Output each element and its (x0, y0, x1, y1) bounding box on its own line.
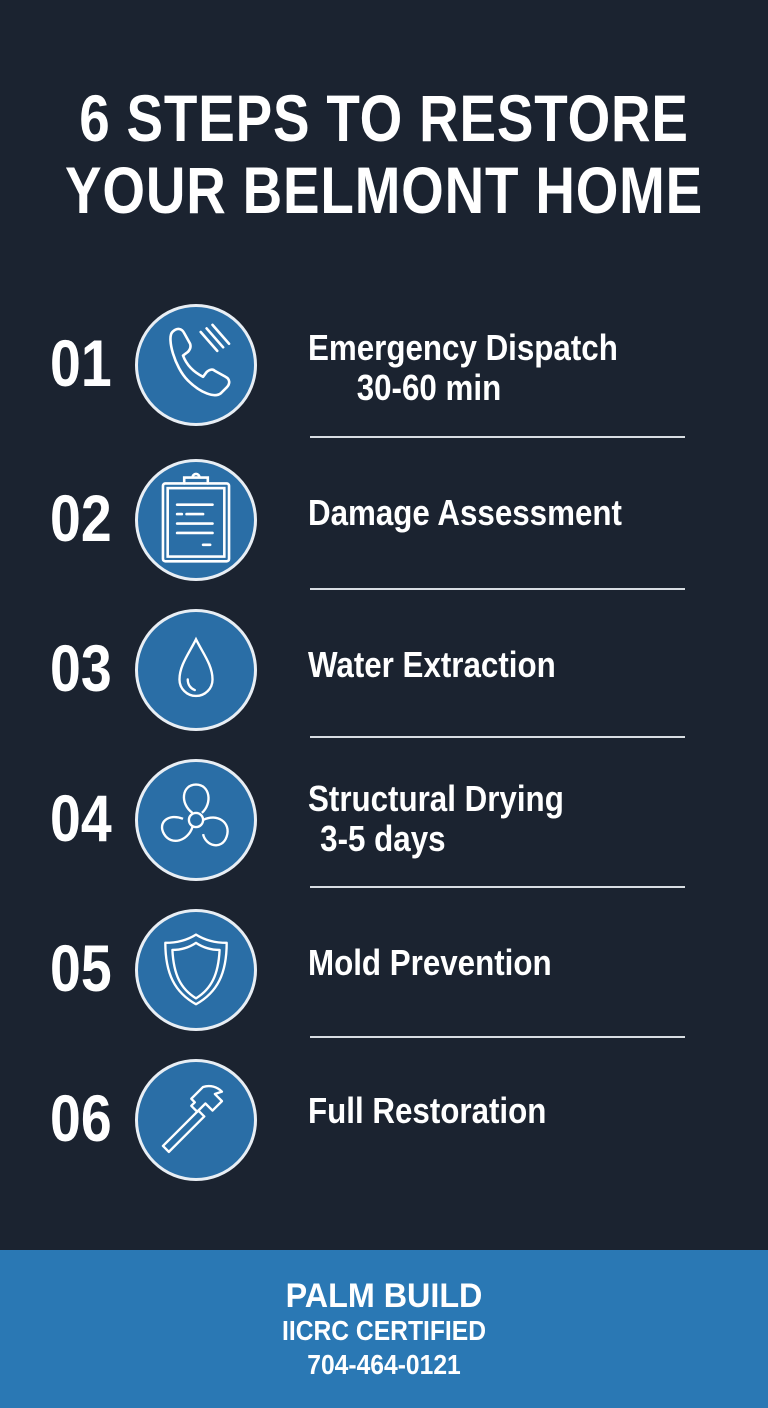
footer: IICRC CERTIFIED (282, 1315, 486, 1346)
footer: 704-464-0121 (307, 1349, 461, 1380)
step 2: 02 (50, 481, 112, 555)
title (65, 81, 703, 227)
step 3 (50, 609, 556, 731)
step 4: Structural Drying (308, 778, 564, 819)
step 1: Emergency Dispatch (308, 327, 618, 368)
step 6 (50, 1059, 546, 1181)
title: YOUR BELMONT HOME (65, 153, 703, 227)
step 3: 03 (50, 631, 112, 705)
step 6: Full Restoration (308, 1090, 546, 1131)
step 2 (50, 459, 622, 581)
step 1: 01 (50, 326, 112, 400)
step 2: Damage Assessment (308, 492, 622, 533)
icon: phone (135, 304, 257, 426)
icon: clipboard (135, 459, 257, 581)
footer: PALM BUILD (286, 1277, 482, 1315)
icon: fan (135, 759, 257, 881)
step 3: Water Extraction (308, 644, 556, 685)
step 4: 3-5 days (320, 818, 446, 859)
step 4 (50, 759, 564, 881)
step 1: 30-60 min (357, 367, 501, 408)
step 6: 06 (50, 1081, 112, 1155)
step 4: 04 (50, 781, 112, 855)
title: 6 STEPS TO RESTORE (79, 81, 689, 155)
step 5: Mold Prevention (308, 942, 552, 983)
icon: hammer (135, 1059, 257, 1181)
step 5: 05 (50, 931, 112, 1005)
footer (0, 1250, 768, 1408)
icon: water drop (135, 609, 257, 731)
step 1 (50, 304, 618, 426)
step 5 (50, 909, 552, 1031)
icon: shield (135, 909, 257, 1031)
